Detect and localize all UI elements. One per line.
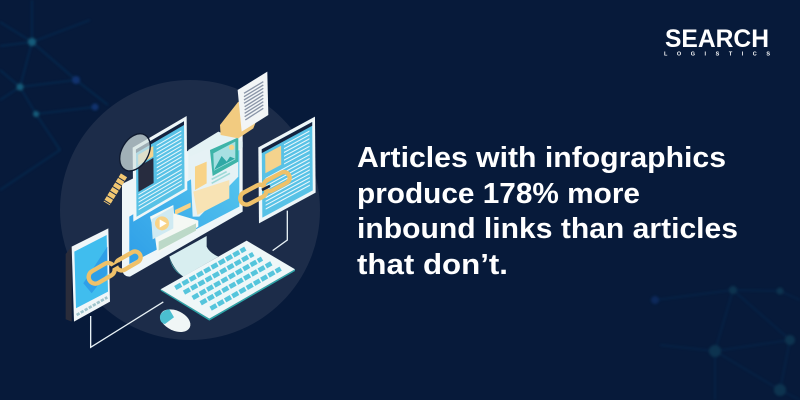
- backdrop circle: [60, 80, 320, 340]
- chain link right: [238, 170, 292, 207]
- logo: LOGISTICS: [664, 52, 770, 58]
- headline text: Articles with infographics: [357, 142, 726, 174]
- mouse: [157, 305, 194, 336]
- left web page window: [133, 116, 187, 222]
- smartphone: [66, 228, 110, 322]
- connector lines: [91, 211, 287, 347]
- image card on monitor: [210, 137, 238, 176]
- monitor stand: [169, 236, 218, 277]
- right web page window: [258, 117, 316, 223]
- illustration: computer and linked pages: [66, 72, 316, 347]
- keyboard: [161, 241, 295, 321]
- document with envelope: [220, 72, 268, 138]
- logo: SEARCH: [665, 25, 769, 53]
- headline text: inbound links than articles: [357, 213, 738, 245]
- headline text: that don’t.: [357, 249, 508, 281]
- video card on monitor: [150, 205, 198, 254]
- chain link left: [86, 249, 143, 286]
- monitor: [122, 123, 243, 277]
- headline text: [357, 142, 738, 281]
- headline text: produce 178% more: [357, 178, 640, 210]
- magnifying glass: [107, 128, 157, 203]
